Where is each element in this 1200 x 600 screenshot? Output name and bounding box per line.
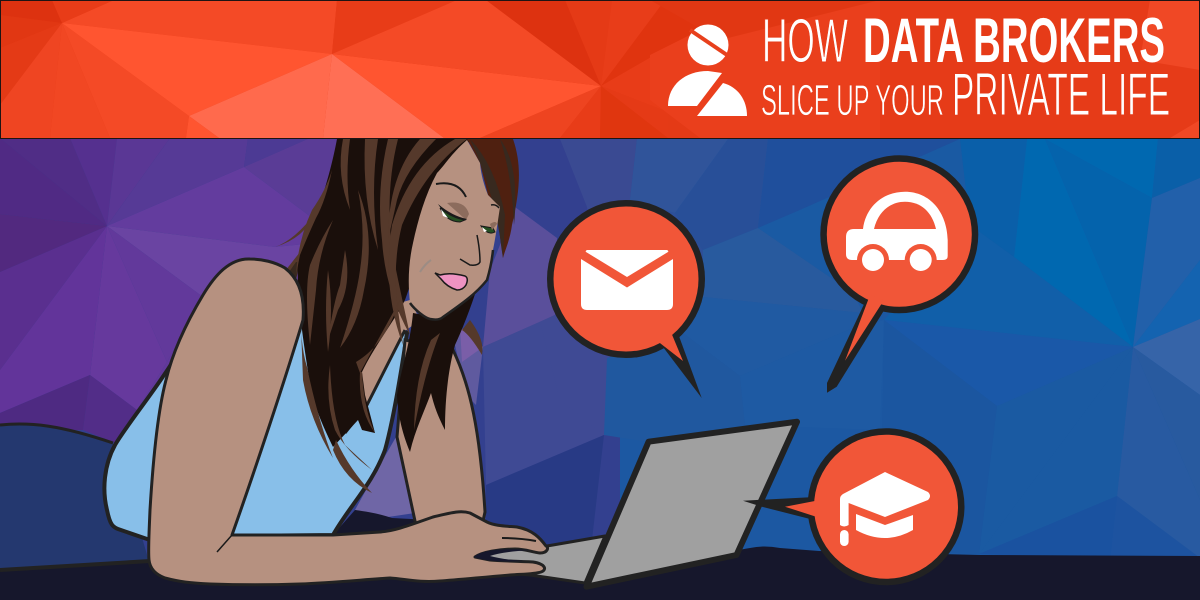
nose bbox=[460, 235, 480, 265]
cheek line bbox=[420, 260, 431, 272]
bubble: education bbox=[743, 428, 964, 585]
tank top bbox=[104, 300, 407, 540]
icon: graduation cap bbox=[840, 472, 930, 546]
title bbox=[761, 6, 1170, 128]
neckline bbox=[345, 330, 405, 433]
finger gap shadow bbox=[474, 549, 530, 562]
laptop screen bbox=[586, 422, 797, 587]
bed edge line bbox=[0, 561, 150, 570]
icon: car bbox=[846, 192, 948, 276]
icon: envelope bbox=[581, 250, 673, 310]
hair: main mass bbox=[298, 139, 470, 447]
panel: polygon background bbox=[0, 138, 1200, 600]
face bbox=[409, 140, 500, 320]
chest skin bbox=[340, 300, 420, 433]
woman illustration bbox=[104, 139, 605, 585]
hair: strands bbox=[296, 139, 482, 493]
finger lines bbox=[217, 535, 536, 552]
blanket bbox=[0, 424, 150, 570]
title: SLICE UP YOUR bbox=[761, 76, 944, 125]
right arm bbox=[397, 340, 485, 535]
bubble: email bbox=[547, 200, 705, 398]
lips bbox=[435, 273, 467, 290]
icon: sliced person bbox=[668, 24, 747, 116]
eyes and brows bbox=[436, 183, 499, 233]
panel: orange polygon header bbox=[0, 0, 1200, 138]
left arm and hand bbox=[149, 259, 548, 585]
flyaway hair bbox=[275, 212, 316, 284]
dark top of blanket behind arm bbox=[333, 510, 430, 535]
title: HOW bbox=[762, 7, 848, 76]
hair: fringe bbox=[467, 139, 519, 258]
bubble: car bbox=[820, 155, 978, 393]
hair: under chin bbox=[397, 285, 478, 452]
keyboard bbox=[470, 536, 605, 583]
bed surface bbox=[0, 546, 1200, 600]
